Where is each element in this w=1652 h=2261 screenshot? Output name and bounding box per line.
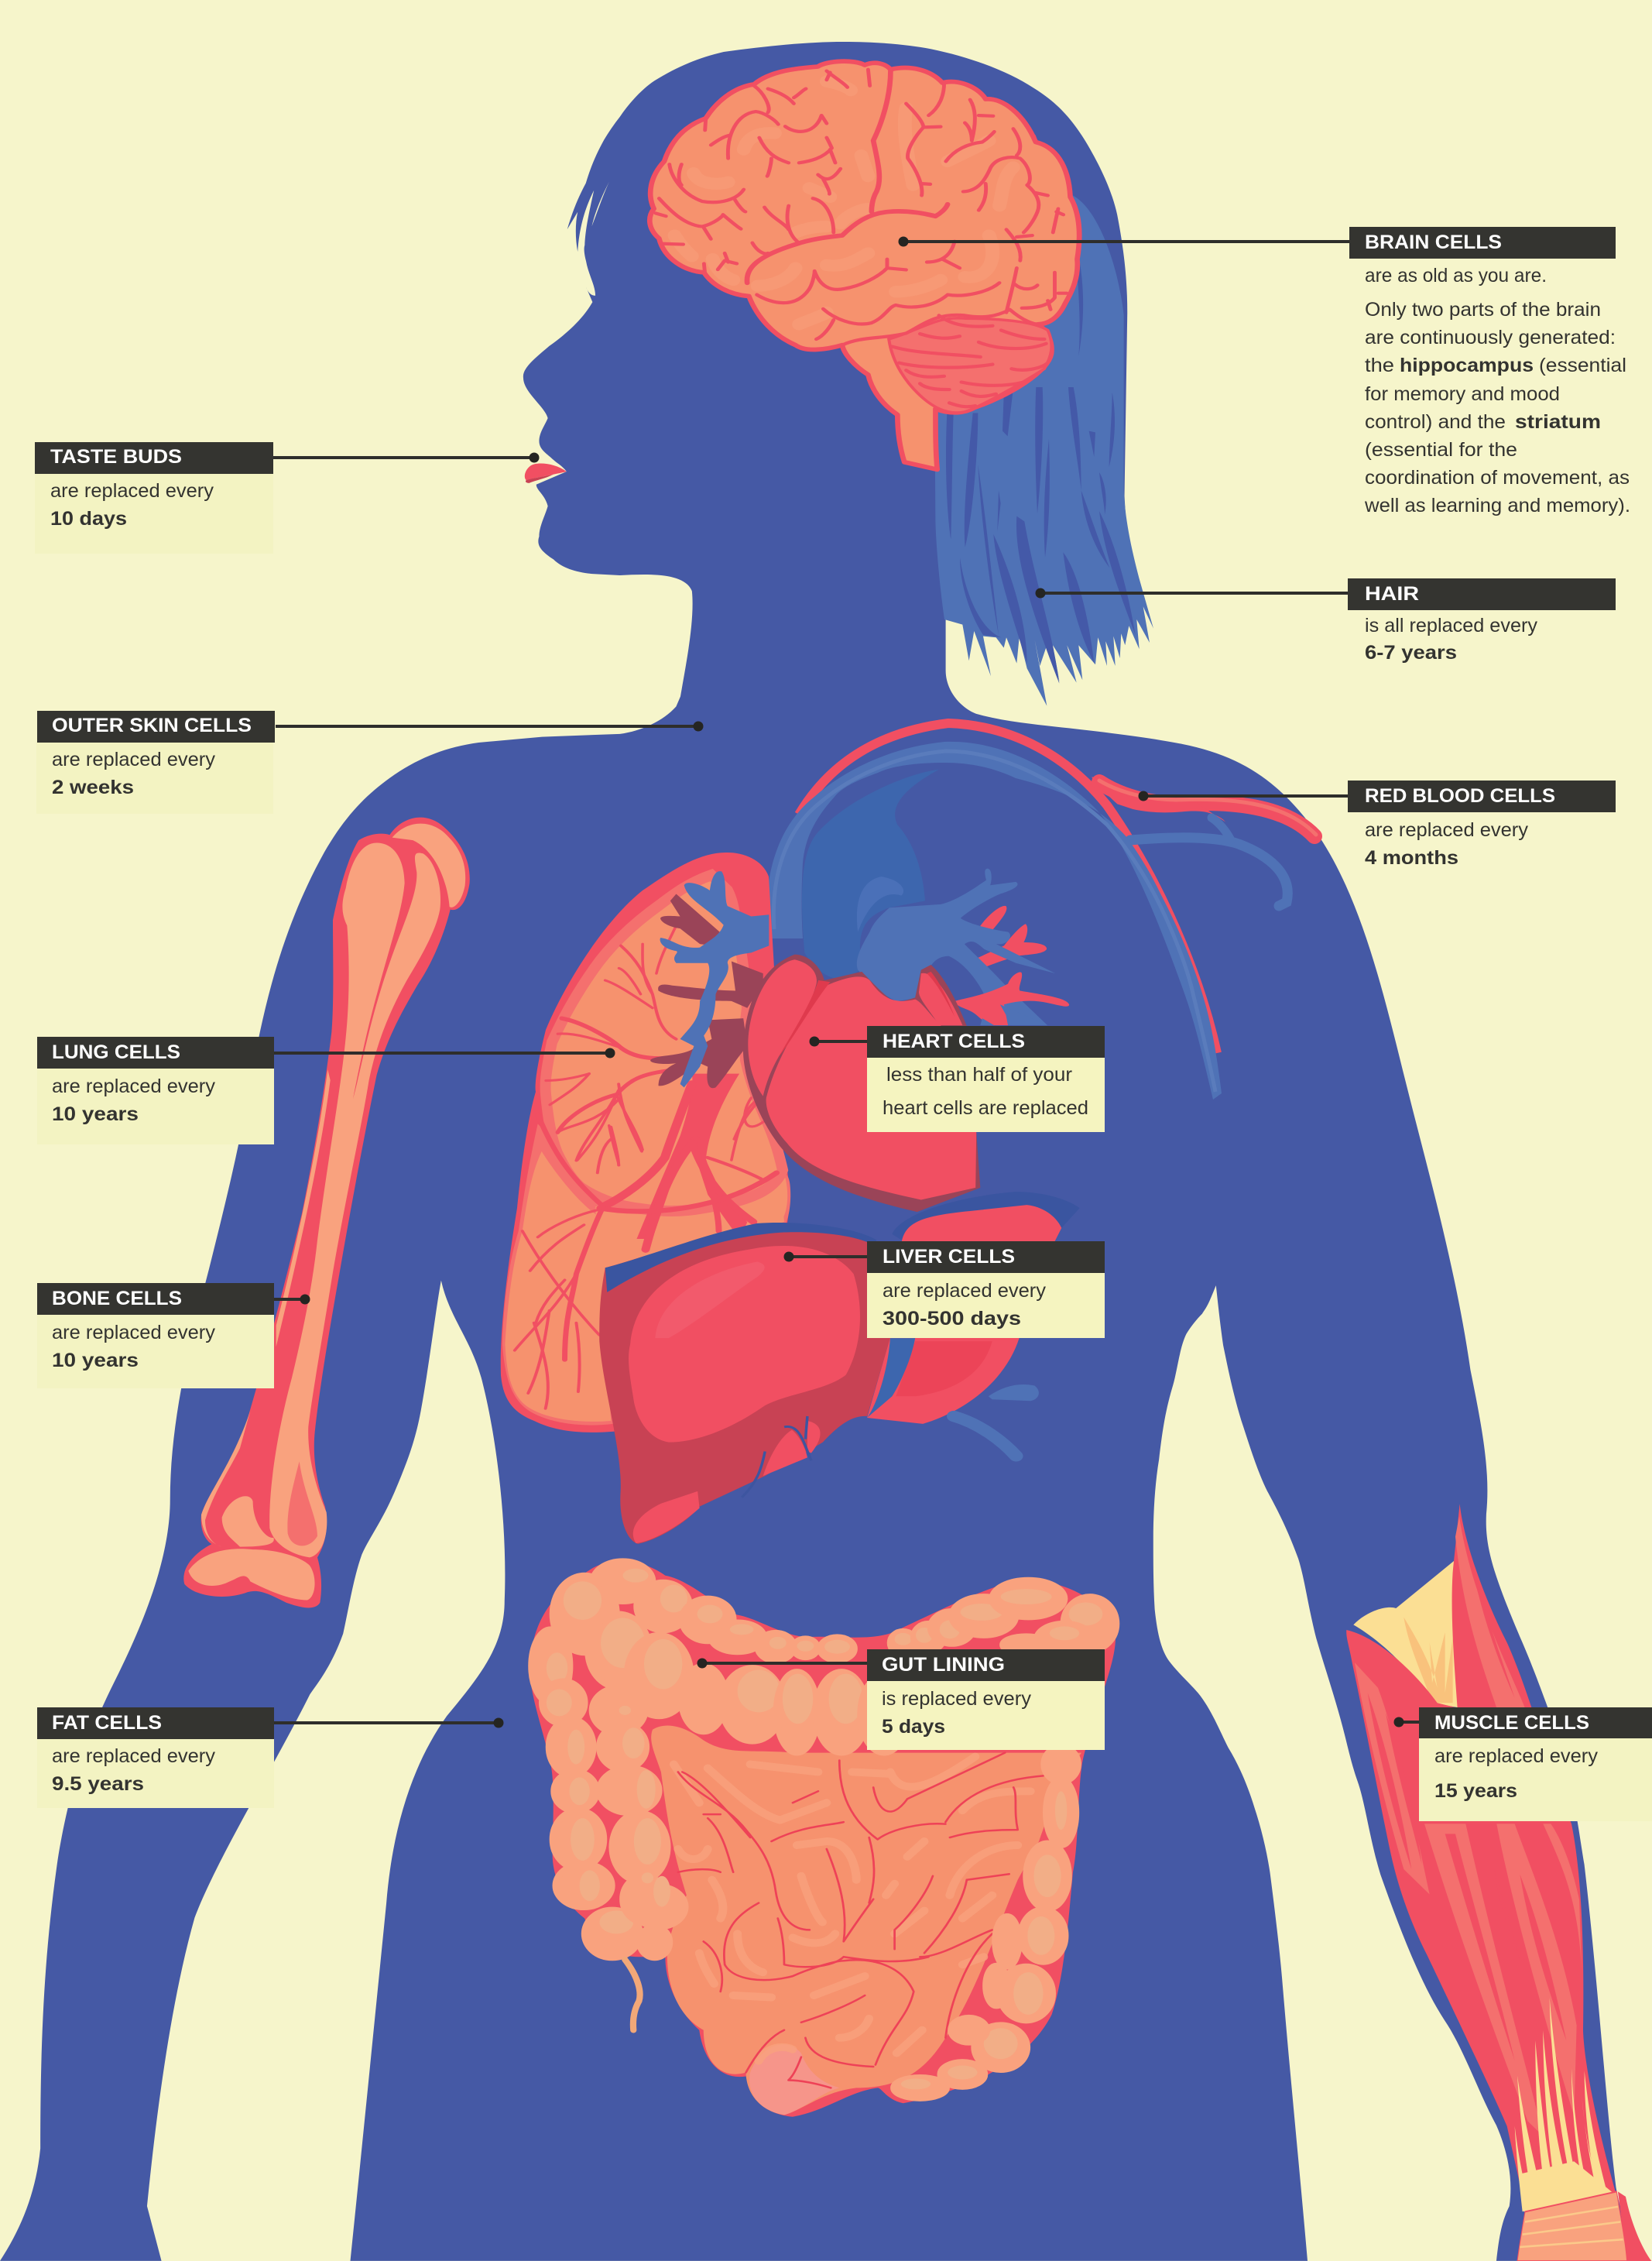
label: muscle cells (1393, 1707, 1652, 1821)
heart left auricle (919, 973, 962, 1025)
label: heart cells (810, 1026, 1105, 1132)
label: brain cells: are as old as you are. (1365, 265, 1547, 286)
pulmonary artery (857, 869, 1055, 1025)
label: hair: is all replaced every (1365, 615, 1538, 636)
icon: muscle (1346, 1504, 1651, 2261)
muscle tendon strands (1515, 1998, 1613, 2211)
cerebellum (889, 318, 1051, 413)
label: liver cells: 300-500 days (883, 1308, 1021, 1329)
bronchi dark (650, 894, 763, 1088)
bronchial branches lower (515, 1084, 776, 1408)
label: hair (1036, 578, 1616, 664)
label: bone cells (37, 1283, 310, 1388)
label: gut lining: is replaced every (882, 1688, 1032, 1710)
label: red blood cells: are replaced every (1365, 819, 1529, 841)
label: liver cells: are replaced every (883, 1280, 1047, 1302)
label: bone cells: are replaced every (52, 1322, 216, 1343)
label: brain cells: coordination of movement, as (1365, 467, 1630, 489)
label: taste buds: 10 days (50, 508, 127, 530)
hair (934, 194, 1153, 706)
label: brain cells (898, 227, 1630, 516)
label: brain cells: well as learning and memory). (1364, 495, 1630, 516)
label: outer skin cells: are replaced every (52, 749, 216, 770)
heart outer (743, 955, 980, 1212)
label: heart cells: heart cells are replaced (883, 1097, 1088, 1119)
label: brain cells: Only two parts of the brain (1365, 299, 1601, 321)
label: liver cells (783, 1241, 1105, 1338)
label: bone cells: BONE CELLS (52, 1288, 182, 1309)
icon: tongue (525, 463, 567, 483)
small intestine folds (678, 1753, 1044, 2088)
vessels: arteries and veins (766, 723, 1316, 1100)
icon: brain (649, 61, 1079, 469)
label: taste buds: TASTE BUDS (50, 446, 182, 468)
label: fat cells (37, 1707, 503, 1808)
label: red blood cells: 4 months (1365, 847, 1458, 869)
label: brain cells: control) and the (1365, 411, 1506, 433)
bronchi blue (660, 871, 769, 1087)
label: taste buds: are replaced every (50, 480, 214, 502)
label: outer skin cells: 2 weeks (52, 777, 134, 798)
stomach behind liver (867, 1192, 1080, 1456)
liver (599, 1223, 890, 1544)
label: brain cells: (essential for the (1365, 439, 1517, 461)
label: outer skin cells (36, 711, 703, 814)
label: brain cells: BRAIN CELLS (1365, 232, 1502, 253)
label: red blood cells (1138, 781, 1616, 869)
label: outer skin cells: OUTER SKIN CELLS (52, 715, 252, 736)
label: lung cells: are replaced every (52, 1076, 216, 1097)
label: fat cells: are replaced every (52, 1745, 216, 1767)
aorta (802, 770, 939, 979)
label: heart cells: HEART CELLS (883, 1031, 1025, 1052)
label: brain cells: the (1365, 355, 1394, 376)
label: heart cells: less than half of your (886, 1064, 1072, 1086)
label: brain cells: hippocampus (1400, 355, 1534, 376)
label: brain cells: are continuously generated: (1365, 327, 1616, 348)
label: fat cells: FAT CELLS (52, 1712, 162, 1734)
intestines (530, 1561, 1116, 2117)
label: brain cells: striatum (1515, 411, 1601, 433)
heart right atrium (748, 959, 817, 1096)
lung upper lobe (546, 875, 783, 1211)
subclavian vein (1130, 838, 1287, 906)
label: taste buds (35, 442, 539, 554)
heart and great vessels (650, 770, 1069, 1212)
label: lung cells: 10 years (52, 1103, 139, 1125)
label: brain cells: for memory and mood (1365, 383, 1560, 405)
label: red blood cells: RED BLOOD CELLS (1365, 785, 1555, 807)
label: fat cells: 9.5 years (52, 1773, 144, 1795)
lung outer shape (501, 853, 790, 1432)
label: muscle cells: are replaced every (1434, 1745, 1599, 1767)
label: gut lining (697, 1649, 1105, 1750)
large intestine base (530, 1561, 1116, 2117)
lungs (501, 853, 790, 1432)
large intestine haustra (532, 1561, 1116, 2098)
vena cava arc (766, 742, 1222, 1100)
label: bone cells: 10 years (52, 1350, 139, 1371)
appendix (625, 1960, 640, 2030)
label: gut lining: 5 days (882, 1716, 945, 1738)
small intestine (651, 1726, 1081, 2115)
label: lung cells (37, 1037, 615, 1144)
bronchial branches upper (546, 921, 763, 1239)
icon: bone (183, 818, 470, 1607)
label: muscle cells: 15 years (1434, 1780, 1517, 1802)
label: muscle cells: MUSCLE CELLS (1434, 1712, 1589, 1734)
subclavian artery (1099, 782, 1314, 836)
label: gut lining: GUT LINING (882, 1654, 1005, 1676)
label: lung cells: LUNG CELLS (52, 1041, 180, 1063)
main bronchial trunk (636, 1074, 747, 1239)
lung lower lobes (502, 1124, 790, 1426)
label: brain cells: (essential (1539, 355, 1626, 376)
red pulmonary veins right (976, 906, 1006, 935)
label: liver cells: LIVER CELLS (883, 1246, 1015, 1268)
heart right ventricle (766, 976, 976, 1200)
label: hair: 6-7 years (1365, 642, 1457, 664)
label: hair: HAIR (1365, 583, 1419, 605)
